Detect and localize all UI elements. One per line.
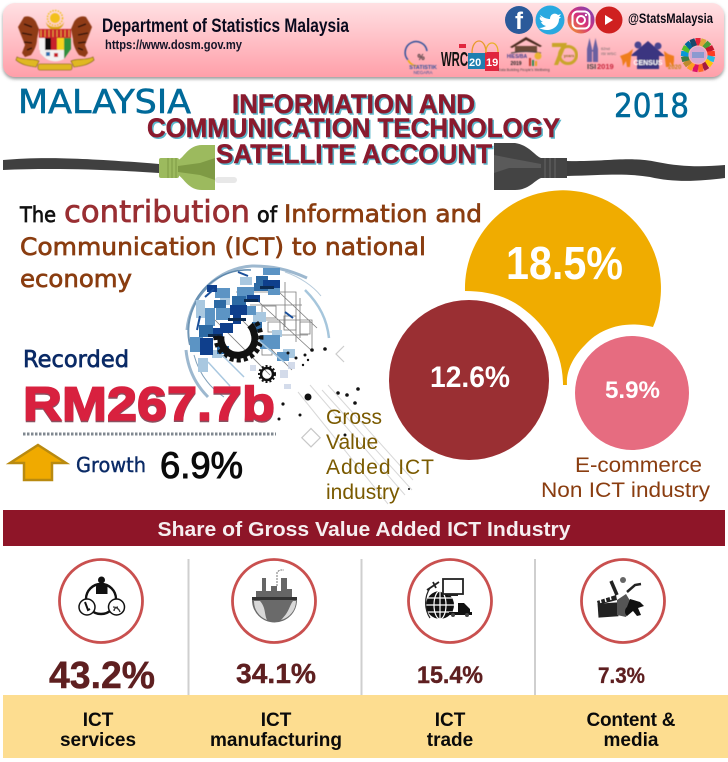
text: content and media: Content & xyxy=(586,710,676,731)
heading: main title: SATELLITE ACCOUNT xyxy=(218,140,494,170)
icon: dark plug with cable xyxy=(494,143,725,190)
icon: small gear xyxy=(259,366,275,382)
icon: globe, screen, truck xyxy=(408,560,492,642)
chart: contribution bubbles xyxy=(389,190,689,460)
logo: SDG wheel xyxy=(681,38,715,72)
text: intro statement: of xyxy=(257,203,278,227)
icon: youtube xyxy=(596,6,622,34)
logo: statistik negara: % xyxy=(417,53,425,62)
icon: people and communications xyxy=(60,560,142,642)
heading: department name: Department of Statistics Malaysia xyxy=(102,16,349,37)
logo: ISI 2019 xyxy=(587,38,616,71)
logo: ISI 2019: 62nd xyxy=(601,46,610,51)
text: ICT manufacturing xyxy=(210,710,342,751)
text: intro statement xyxy=(19,195,482,293)
column: ICT services xyxy=(49,560,155,751)
stat: growth value: 6.9% xyxy=(160,445,243,486)
heading: main title: SATELLITE ACCOUNT xyxy=(216,139,492,169)
text: e-commerce label: E-commerce xyxy=(575,454,702,477)
wireframe mesh xyxy=(215,276,317,375)
heading: main title xyxy=(147,89,562,170)
icon: facebook: f xyxy=(515,8,524,35)
heading: main title: INFORMATION AND xyxy=(234,90,476,120)
logo: WRC 2019: 19 xyxy=(486,57,498,69)
logo: 70 years xyxy=(552,43,576,65)
section banner xyxy=(3,510,725,546)
stat: recorded value: RM267.7b xyxy=(23,377,275,430)
logo: census xyxy=(620,41,682,71)
section banner: Share of Gross Value Added ICT Industry xyxy=(158,519,571,541)
header banner xyxy=(3,3,724,77)
logo: WRC 2019: WRC xyxy=(441,49,468,71)
scattered dots xyxy=(278,347,410,490)
text: GVA ICT industry label xyxy=(326,406,434,504)
heading: year: 2018 xyxy=(614,86,689,125)
band: category labels background xyxy=(3,695,728,758)
text: growth label: Growth xyxy=(76,453,146,477)
bubble: e-commerce 5.9%: 5.9% xyxy=(605,377,660,404)
text: e-commerce label xyxy=(541,454,711,502)
icon: clapperboard and camera xyxy=(582,560,664,642)
heading: country: MALAYSIA xyxy=(18,82,191,121)
column: content and media xyxy=(582,560,676,751)
text: GVA ICT industry label: Added ICT xyxy=(326,456,434,479)
logo: census: CENSUS xyxy=(633,60,663,67)
heading: main title: INFORMATION AND xyxy=(232,89,475,119)
icon: coat of arms xyxy=(16,10,94,70)
logo: ISI 2019: 2019 xyxy=(597,62,614,71)
logo: WRC 2019 xyxy=(441,41,499,71)
logo: household survey: HIES/BA xyxy=(507,54,528,60)
logo: 70 years: years xyxy=(564,53,575,58)
blue accent strokes xyxy=(197,272,293,330)
stat: recorded value: RM267.7b xyxy=(23,378,275,432)
text: GVA ICT industry label: Gross xyxy=(326,406,382,429)
bubble: total 18.5%: 18.5% xyxy=(506,237,623,289)
stat: 34.1%: 34.1% xyxy=(236,658,316,689)
text: ICT trade: trade xyxy=(427,730,473,751)
column: ICT manufacturing xyxy=(210,560,342,751)
logo: statistik negara: NEGARA xyxy=(413,70,433,75)
heading: main title: COMMUNICATION TECHNOLOGY xyxy=(148,114,562,144)
text: content and media: media xyxy=(604,730,659,751)
lower fade tiles xyxy=(250,362,295,389)
text: intro statement: contribution xyxy=(64,195,250,230)
stat: 43.2%: 43.2% xyxy=(49,655,155,697)
text: ICT manufacturing: manufacturing xyxy=(210,730,342,751)
logo: household survey xyxy=(498,37,550,72)
text: ICT trade xyxy=(427,710,473,751)
bubble: GVA ICT industry 12.6%: 12.6% xyxy=(430,361,510,394)
column: ICT trade xyxy=(408,560,492,751)
icon: green plug with cable xyxy=(3,145,237,190)
text: ICT manufacturing: ICT xyxy=(261,710,292,731)
globe arcs xyxy=(186,266,329,397)
icon: facebook xyxy=(505,6,533,35)
text: website: https://www.dosm.gov.my xyxy=(105,37,243,52)
icon: twitter xyxy=(536,6,564,34)
text: GVA ICT industry label: industry xyxy=(326,481,400,504)
icon: factory on globe xyxy=(232,560,316,642)
text: intro statement: The xyxy=(19,203,56,227)
text: intro statement: economy xyxy=(20,265,132,293)
text: ICT services: services xyxy=(60,730,136,751)
logo: statistik negara: STATISTIK xyxy=(409,65,437,71)
logo: household survey: Data Building People's Wellbeing xyxy=(498,68,550,72)
text: ICT services xyxy=(60,710,136,751)
bubble: e-commerce 5.9% xyxy=(575,336,689,450)
stat: 7.3%: 7.3% xyxy=(598,663,645,688)
text: recorded label: Recorded xyxy=(23,347,129,373)
text: content and media xyxy=(586,710,676,751)
logo: ISI 2019: ISI xyxy=(587,62,596,71)
text: intro statement: Information and xyxy=(284,200,482,228)
text: ICT services: ICT xyxy=(83,710,114,731)
logo: WRC 2019: 20 xyxy=(469,57,481,69)
blue tiles xyxy=(190,268,295,372)
logo: household survey: 2019 xyxy=(510,61,522,67)
text: e-commerce label: Non ICT industry xyxy=(541,479,711,502)
logo: ISI 2019: ISI WSC xyxy=(601,51,616,56)
text: ICT trade: ICT xyxy=(435,710,466,731)
illustration: digital globe xyxy=(186,266,413,504)
icon: instagram xyxy=(568,6,594,34)
icon: growth arrow xyxy=(10,445,66,480)
bubble: GVA ICT industry 12.6% xyxy=(389,300,549,460)
logo: statistik negara xyxy=(405,42,437,75)
text: GVA ICT industry label: Value xyxy=(326,431,378,454)
stat: 15.4%: 15.4% xyxy=(417,662,483,689)
bubble: total 18.5% xyxy=(465,190,661,385)
text: intro statement: Communication (ICT) to national xyxy=(20,233,426,261)
logo: census: 2020 xyxy=(668,65,682,71)
heading: main title: COMMUNICATION TECHNOLOGY xyxy=(147,113,560,143)
icon: large gear xyxy=(216,321,261,360)
